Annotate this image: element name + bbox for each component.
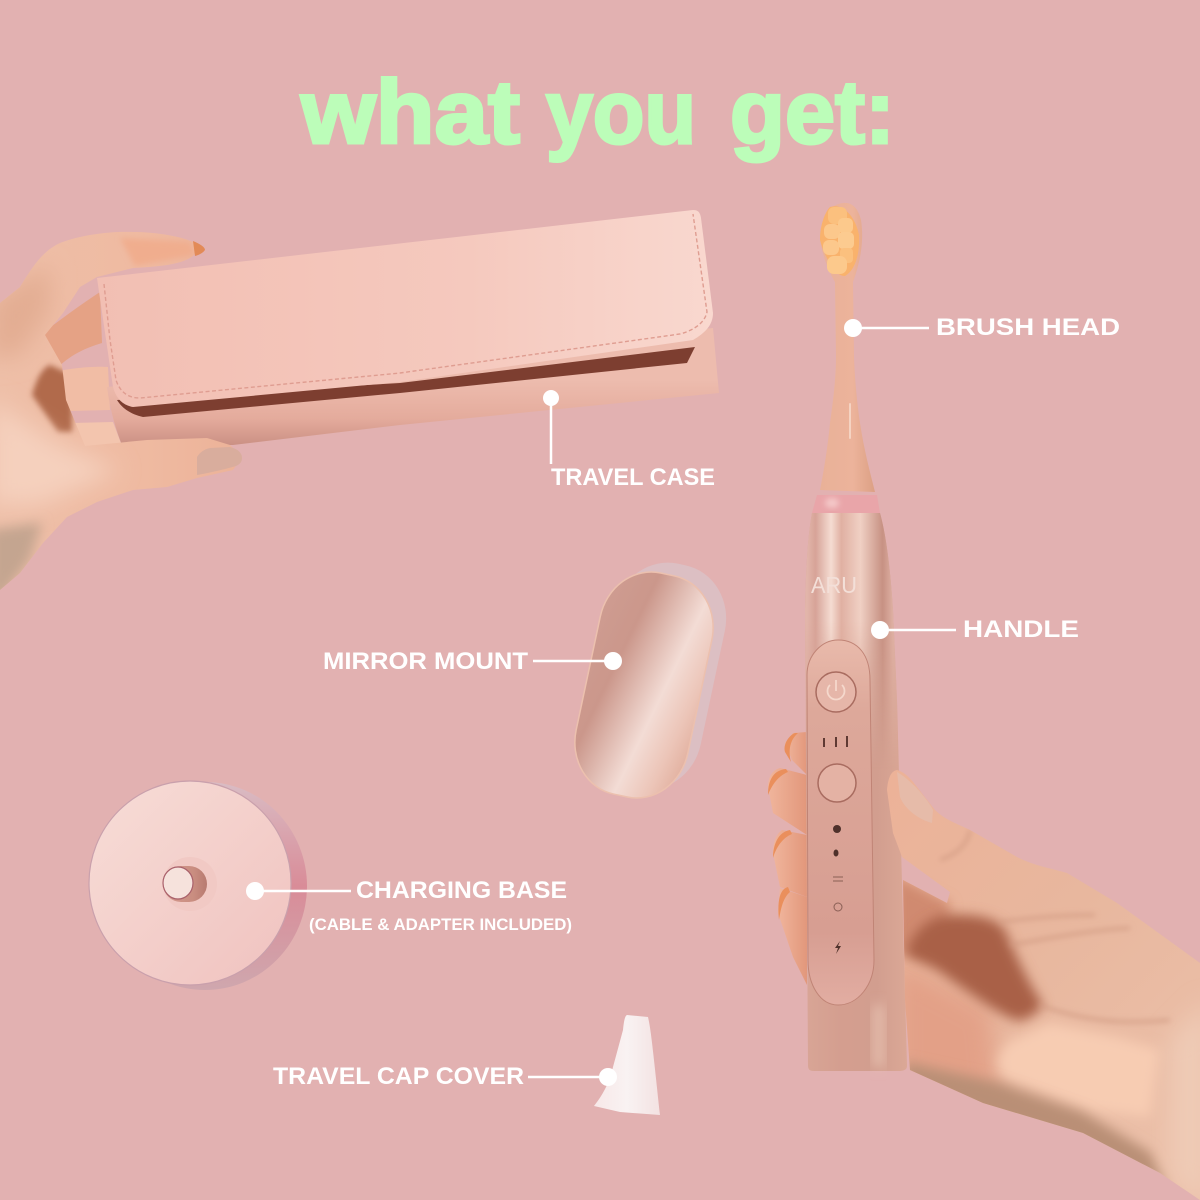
peg cylinder [163, 866, 207, 902]
handle upper sheen [805, 513, 896, 710]
finger tone [895, 875, 950, 955]
callout: mirror mount [323, 648, 622, 675]
illustration: charging base [89, 781, 307, 990]
mode icons [833, 825, 843, 954]
illustration: mirror mount [565, 553, 736, 807]
illustration: travel case [97, 210, 719, 445]
palm shadow [905, 915, 1043, 1020]
thumb nail [897, 772, 933, 823]
base face [89, 781, 291, 985]
case lower body [107, 328, 719, 445]
palm lower tone [904, 966, 999, 1082]
callout: handle: HANDLE [963, 616, 1079, 643]
illustration: travel cap cover [594, 1015, 660, 1115]
case dark slit [117, 347, 695, 417]
callout: handle [871, 616, 1079, 643]
callout: charging base: CHARGING BASE [356, 877, 567, 904]
title: what [300, 63, 520, 163]
brush neck [820, 203, 875, 492]
title [300, 63, 895, 163]
handle body [805, 513, 907, 1071]
illustration: right hand [887, 770, 1200, 1200]
collar [812, 495, 880, 513]
stem highlight [849, 403, 851, 439]
peg halo [163, 857, 217, 911]
indicator lights [824, 736, 847, 747]
light patch [997, 1023, 1160, 1117]
mode button [818, 764, 856, 802]
peg top [163, 867, 193, 899]
wrist [1170, 1000, 1200, 1200]
callout: brush head [844, 314, 1120, 341]
power glyph [827, 680, 844, 700]
creases [940, 830, 1170, 1022]
title: you [546, 63, 696, 163]
illustration: left hand fingers behind case [40, 292, 122, 447]
callout: charging base [246, 877, 572, 934]
callout: mirror mount: MIRROR MOUNT [323, 648, 528, 675]
dark lower edge [905, 1062, 1170, 1190]
case flap [97, 210, 713, 407]
title: get: [730, 63, 895, 163]
index nail [193, 241, 205, 256]
callout: brush head: BRUSH HEAD [936, 314, 1120, 341]
bristles [820, 206, 859, 276]
handle lower sheen [874, 1005, 883, 1067]
case stitching [104, 214, 707, 398]
logo: ARU [811, 572, 857, 598]
callout: travel cap cover: TRAVEL CAP COVER [273, 1063, 524, 1090]
callout: travel case: TRAVEL CASE [551, 464, 715, 491]
callout: travel case [543, 390, 715, 491]
power button [816, 672, 856, 712]
illustration: fingers behind handle [768, 732, 807, 985]
illustration: left hand [0, 232, 242, 600]
callout: charging base: (CABLE & ADAPTER INCLUDED) [309, 915, 572, 934]
thumb nail [197, 447, 242, 475]
base side [103, 782, 307, 990]
control panel [807, 640, 874, 1005]
illustration: toothbrush [805, 203, 907, 1071]
